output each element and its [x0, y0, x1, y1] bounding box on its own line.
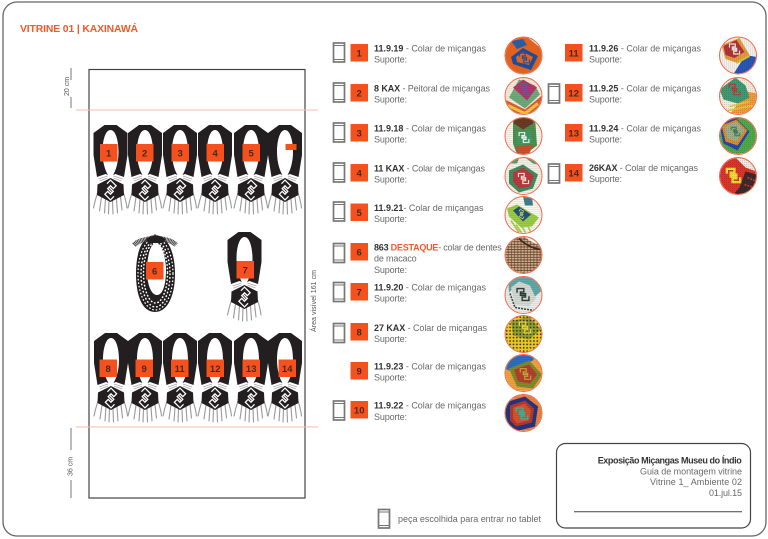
necklace 6: monkey teeth [134, 236, 176, 312]
item 1: 11.9.19 - Colar de miçangas [374, 44, 486, 54]
item 9 [350, 354, 542, 392]
necklace with small marker [268, 125, 302, 214]
item 2: 8 KAX - Peitoral de miçangas [374, 84, 490, 94]
item 6: highlight: 6 [357, 248, 362, 258]
item 11: 11 [569, 48, 579, 60]
item 2: 2 [357, 88, 362, 100]
item 14: 26KAX - Colar de miçangas [589, 163, 698, 173]
necklace 14 [268, 333, 302, 422]
item 14 [548, 158, 756, 194]
necklace 9: 9 [142, 364, 147, 375]
item 10 [334, 394, 542, 432]
item 2: Suporte: [374, 94, 407, 104]
item 1: 1 [357, 48, 363, 60]
item 4: 11 KAX - Colar de miçangas [374, 164, 486, 174]
credits panel: 01.jul.15 [709, 488, 742, 498]
item 9: 9 [357, 366, 362, 378]
necklace 2: 2 [142, 148, 147, 160]
item 4: 4 [357, 168, 363, 180]
necklace 8: 8 [106, 364, 111, 375]
item 3: Suporte: [374, 134, 407, 144]
item 13: 11.9.24 - Colar de miçangas [589, 124, 702, 134]
necklace 7 [228, 232, 262, 321]
item 5 [334, 196, 542, 234]
necklace 13 [234, 333, 268, 422]
item 5: 11.9.21- Colar de miçangas [374, 203, 484, 213]
item 4 [334, 158, 542, 194]
necklace 3: 3 [178, 148, 183, 160]
legend: tablet icon and note: peça escolhida para entrar no tablet [398, 514, 541, 524]
necklace 13: 13 [246, 364, 256, 375]
item 8: Suporte: [374, 334, 407, 344]
necklace 3 [163, 125, 197, 214]
item 7: 7 [357, 288, 362, 298]
item 14: 14 [568, 168, 580, 180]
item 3: 3 [357, 128, 362, 140]
item 3 [334, 118, 542, 154]
necklace 14: 14 [282, 364, 293, 375]
dimension: 36 cm: 36 cm [68, 457, 74, 476]
dimension: visible area: Área visível 161 cm [309, 270, 318, 332]
item 6: highlight: de macaco [374, 254, 417, 264]
necklace 2 [128, 125, 162, 214]
credits panel [556, 444, 750, 528]
item 12 [548, 78, 756, 114]
credits panel: Guia de montagem vitrine [640, 466, 742, 476]
necklace 8 [94, 333, 128, 422]
dimension: 36 cm [68, 428, 74, 498]
item 1 [334, 37, 542, 74]
dimension: 20 cm: 20 cm [64, 77, 71, 96]
necklaces: bottom row [94, 333, 302, 422]
item 12: 12 [568, 88, 579, 100]
necklace 12: 12 [210, 364, 220, 375]
item 12: 11.9.25 - Colar de miçangas [589, 84, 702, 94]
item 13: Suporte: [589, 134, 622, 144]
item 9: Suporte: [374, 372, 407, 382]
item 5: Suporte: [374, 214, 407, 224]
item 11: 11.9.26 - Colar de miçangas [589, 44, 702, 54]
item 4: Suporte: [374, 174, 407, 184]
item 6: highlight: 863 DESTAQUE- colar de dentes [374, 243, 502, 253]
credits panel: Vitrine 1_ Ambiente 02 [650, 477, 742, 487]
item 2 [334, 78, 542, 114]
item 6: highlight: Suporte: [374, 265, 407, 275]
item 10: Suporte: [374, 412, 407, 422]
necklace 11 [163, 333, 197, 422]
necklace 7: 7 [243, 266, 248, 276]
necklace 5 [234, 125, 268, 214]
item 11: Suporte: [589, 54, 622, 64]
necklace 6: monkey teeth: 6 [152, 266, 157, 278]
display case outline [89, 70, 305, 498]
item 8 [334, 316, 542, 352]
item 7 [334, 276, 542, 314]
item 10: 11.9.22 - Colar de miçangas [374, 401, 486, 411]
necklace 4 [198, 125, 232, 214]
necklace 4: 4 [213, 148, 219, 160]
item 10: 10 [354, 406, 364, 416]
item 13: 13 [568, 128, 579, 140]
item 14: Suporte: [589, 174, 622, 184]
necklace 1 [94, 125, 128, 214]
item 1: Suporte: [374, 54, 407, 64]
legend: tablet icon and note [378, 510, 541, 528]
dimension: 20 cm [64, 68, 71, 108]
credits panel: Exposição Miçangas Museu do Índio [598, 456, 742, 466]
necklace 9 [128, 333, 162, 422]
necklace 12 [198, 333, 232, 422]
necklace 11: 11 [175, 364, 185, 375]
item 8: 8 [357, 328, 362, 338]
item 3: 11.9.18 - Colar de miçangas [374, 124, 486, 134]
item 11 [565, 37, 756, 74]
item 7: 11.9.20 - Colar de miçangas [374, 282, 486, 292]
item 13 [565, 118, 756, 154]
item 7: Suporte: [374, 294, 407, 304]
item 6: highlight [334, 236, 542, 275]
necklaces: top row [94, 125, 302, 214]
title: VITRINE 01 | KAXINAWÁ [20, 22, 138, 35]
item 5: 5 [357, 208, 363, 219]
necklace 1: 1 [106, 148, 112, 160]
necklace 5: 5 [249, 148, 255, 160]
item 9: 11.9.23 - Colar de miçangas [374, 361, 486, 371]
item 12: Suporte: [589, 94, 622, 104]
item 8: 27 KAX - Colar de miçangas [374, 323, 488, 333]
